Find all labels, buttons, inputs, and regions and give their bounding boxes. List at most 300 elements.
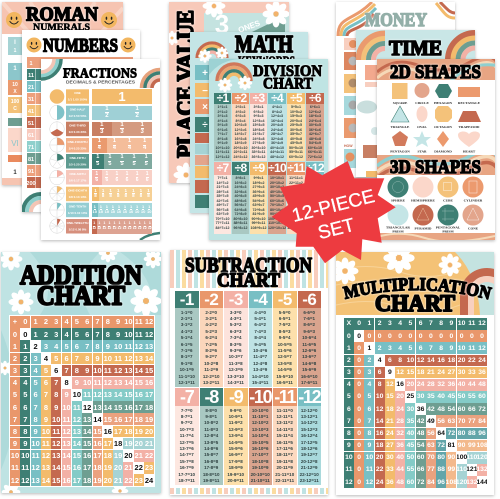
subtraction table: 13-8=5: [204, 440, 218, 445]
multiplication table: 48: [437, 406, 445, 413]
bar: twelfths: 1: [144, 221, 146, 225]
division table: 132÷12=11: [306, 221, 324, 225]
fraction labels: 1/1 1.00 100%: [68, 98, 88, 102]
multiplication table: 66: [417, 466, 424, 473]
addition table: 8: [106, 330, 110, 339]
subtraction table: 14-9=5: [229, 440, 243, 445]
multiplication table: 12: [386, 381, 394, 388]
multiplication table: 20: [407, 381, 414, 388]
2D shape labels: PENTAGON: [390, 150, 410, 154]
division table: 30÷10=3: [270, 185, 284, 189]
multiplication table: 3: [388, 320, 392, 327]
bar: eighths: 8: [125, 193, 127, 198]
subtraction table: 6-2=4: [205, 335, 217, 340]
keyword rows: [195, 65, 215, 208]
addition table: 19: [124, 439, 133, 448]
rainbow: [197, 43, 227, 58]
multiplication table: 18: [386, 406, 394, 413]
bar: fifths: 5: [120, 161, 124, 167]
multiplication table: 20: [396, 393, 404, 400]
division table: 60÷10=6: [270, 198, 284, 202]
division table: 72÷12=6: [308, 198, 322, 202]
addition table: 22: [124, 476, 133, 485]
subtitle: DECIMALS & PERCENTAGES: [66, 80, 136, 86]
addition table: 11: [104, 366, 112, 375]
fraction labels: 1/12 0.08 8%: [69, 227, 87, 231]
subtraction table: 6-4=2: [254, 322, 266, 327]
multiplication table: 16: [437, 357, 445, 364]
addition table: 16: [114, 415, 122, 424]
subtraction table: 14-3=11: [228, 380, 244, 385]
multiplication table: 12: [478, 320, 486, 327]
addition table: 9: [64, 390, 69, 399]
bar: tenths: 1: [124, 204, 126, 209]
division table: 25÷5=5: [290, 123, 302, 127]
division table: 16÷4=4: [271, 118, 283, 122]
division table: 44÷4=11: [270, 150, 284, 154]
multiplication table: 50: [407, 454, 414, 461]
subtraction table: 8-2=6: [205, 348, 217, 353]
bar: fifths: [92, 154, 152, 168]
multiplication table: 77: [427, 466, 435, 473]
addition table: 10: [31, 439, 40, 448]
addition table: 10: [42, 427, 50, 436]
poster: multiplication chart: [336, 252, 494, 495]
subtraction table: 10-3=7: [229, 354, 243, 359]
icon: smiley left: [6, 12, 22, 28]
title: fractions: FRACTIONS: [63, 66, 137, 82]
addition table: 13: [62, 439, 71, 448]
bar: tenths: 1: [148, 204, 150, 209]
bar: twelfths: 1: [129, 221, 131, 225]
division table: 3÷3=1: [253, 105, 264, 109]
division table: 63÷7=9: [216, 212, 229, 216]
addition table: 15: [145, 366, 153, 375]
addition table: 8: [64, 378, 69, 387]
addition table: 4: [44, 354, 48, 363]
addition table: 6: [23, 403, 27, 412]
subtraction table: 9-4=5: [254, 342, 266, 347]
numeral cards: I: [14, 40, 16, 46]
bar: twelfths: 1: [139, 221, 141, 225]
multiplication table: 6: [419, 320, 422, 327]
division table: 48÷4=12: [270, 154, 284, 158]
multiplication table: 66: [468, 406, 476, 413]
addition table: 12: [114, 366, 122, 375]
bar: eighths: 8: [117, 193, 119, 198]
division table: 110÷11=10: [287, 216, 305, 220]
title: chart: CHART: [375, 291, 455, 316]
multiplication table: 0: [388, 333, 392, 340]
subtraction table: 10-6=4: [302, 335, 316, 340]
addition table: 20: [135, 439, 143, 448]
division table: 8÷4=2: [272, 110, 282, 114]
subtraction table: 18-9=9: [229, 465, 243, 470]
subtraction table: 18-10=8: [252, 459, 269, 464]
multiplication table: 32: [437, 381, 445, 388]
3D shape labels: PYRAMID: [415, 226, 432, 230]
bar: halves: 2: [105, 113, 109, 119]
subtraction table: 5-3=2: [230, 322, 242, 327]
addition table: 9: [23, 439, 27, 448]
bar: tenths: [92, 203, 152, 217]
division table: 88÷11=8: [289, 208, 303, 212]
number grid: 51: [28, 121, 34, 127]
multiplication table: 5: [408, 345, 412, 352]
fraction labels: 1/6 0.17 17%: [69, 178, 87, 182]
division table: 24÷12=2: [308, 180, 322, 184]
subtraction table: 16-5=11: [277, 380, 293, 385]
multiplication table: 4: [398, 320, 402, 327]
bar: sixths: 1: [136, 171, 138, 177]
addition table: 10: [21, 451, 29, 460]
bar: eighths: 8: [109, 193, 112, 198]
addition table: 24: [145, 476, 153, 485]
division table: 6÷1=6: [217, 128, 228, 132]
number grid: 91: [28, 169, 34, 175]
addition table: 16: [145, 378, 153, 387]
addition table: 19: [135, 427, 143, 436]
addition table: 11: [73, 403, 81, 412]
division table: 90÷9=10: [251, 216, 266, 220]
division table: 80÷8=10: [233, 216, 248, 220]
fraction labels: 1/8 0.13 13%: [69, 195, 87, 199]
addition table: 18: [145, 403, 153, 412]
division table: 99÷9=11: [252, 221, 265, 225]
3D shape icons: [388, 176, 484, 226]
addition table: 8: [106, 317, 110, 326]
subtraction table: 6-5=1: [279, 316, 291, 321]
multiplication table: 8: [368, 430, 371, 437]
subtraction table: 12-6=6: [302, 348, 316, 353]
3D shape labels: PRISM: [442, 230, 454, 234]
addition table: 20: [124, 451, 133, 460]
multiplication table: 7: [368, 418, 371, 425]
multiplication table: 18: [417, 369, 424, 376]
addition table: 12: [42, 451, 50, 460]
addition table: 14: [145, 354, 153, 363]
division table: 35÷7=5: [216, 194, 229, 198]
division table: 50÷10=5: [270, 194, 284, 198]
bar: sixths: 1: [95, 171, 98, 177]
addition table: 13: [104, 390, 112, 399]
title: money: MONEY: [365, 10, 427, 31]
multiplication table: 28: [427, 381, 435, 388]
bar: tenths: 1: [142, 204, 144, 209]
bar: tenths: 10: [129, 209, 133, 214]
division table: 100÷10=10: [268, 216, 286, 220]
multiplication table: 96: [437, 479, 445, 486]
multiplication table: 0: [460, 333, 463, 340]
division table: 28÷4=7: [271, 132, 283, 136]
subtraction table: 14-10=4: [252, 433, 269, 438]
addition table: 8: [54, 390, 58, 399]
subtraction table: 3-1=2: [181, 322, 193, 327]
multiplication table: 44: [396, 466, 404, 473]
division table: 36÷12=3: [308, 185, 322, 189]
addition table: 3: [54, 317, 58, 326]
addition table: 6: [13, 403, 17, 412]
division table: 6÷3=2: [253, 110, 264, 114]
subtraction table: 13-4=9: [253, 367, 267, 372]
multiplication table: 45: [407, 442, 414, 449]
2D shape icons: [391, 83, 481, 147]
bar: sixths: 6: [95, 177, 98, 183]
bar: tenths: 1: [100, 204, 102, 209]
bar: twelfths: 1: [93, 221, 95, 225]
bar: tenths: 1: [106, 204, 108, 209]
bar: twelfths: [92, 219, 152, 234]
subtraction table: [175, 291, 321, 485]
multiplication table: 0: [398, 333, 402, 340]
subtraction table: 13-11=2: [277, 420, 293, 425]
2D shape labels: OVAL: [417, 125, 427, 129]
fraction labels: 1/2 0.50 50%: [69, 114, 87, 118]
addition table: 9: [75, 378, 79, 387]
addition table: 7: [54, 378, 58, 387]
coin rows: [344, 38, 358, 168]
division table: 4÷1=4: [217, 118, 228, 122]
place value panel: [204, 9, 294, 53]
multiplication table: 60: [407, 479, 414, 486]
addition table: 3: [34, 354, 38, 363]
bar: twelfths: 12: [97, 226, 101, 230]
subtraction table: 10-1=9: [180, 367, 194, 372]
addition table: 7: [13, 415, 17, 424]
number grid: [26, 57, 133, 188]
subtraction table: 14-11=3: [277, 427, 293, 432]
division table: 72÷6=12: [308, 154, 322, 158]
bar: thirds: 1: [100, 122, 104, 128]
multiplication table: 90: [458, 442, 465, 449]
stripes bottom: [170, 488, 328, 494]
addition table: 16: [135, 390, 143, 399]
title: chart: CHART: [263, 76, 313, 92]
addition table: 6: [44, 378, 48, 387]
division table: 32÷4=8: [271, 136, 283, 140]
addition table: 16: [104, 427, 112, 436]
multiplication table: 28: [396, 418, 404, 425]
addition table: 21: [145, 439, 153, 448]
bar: halves: 1: [135, 106, 139, 112]
subtraction table: 16-12=4: [301, 433, 318, 438]
addition table: 2: [44, 317, 48, 326]
division table: 66÷6=11: [308, 150, 322, 154]
bar: sixths: 6: [105, 177, 108, 183]
multiplication table: 12: [417, 357, 424, 364]
division table: 22÷11=2: [289, 180, 303, 184]
multiplication table: 50: [458, 393, 465, 400]
subtraction table: 4-4=0: [254, 310, 266, 314]
division table: 15÷5=3: [290, 114, 302, 118]
division table: 16÷2=8: [234, 136, 247, 140]
multiplication table: 63: [448, 418, 455, 425]
addition table: 7: [85, 342, 89, 351]
fraction labels: [66, 89, 89, 234]
subtraction table: 7-1=6: [181, 348, 193, 353]
poster: subtraction chart: [170, 250, 328, 495]
addition table: 1: [13, 342, 17, 351]
subtraction table: 10-9=1: [229, 414, 243, 419]
2D shape labels: STAR: [417, 150, 427, 154]
multiplication table: 24: [478, 357, 486, 364]
multiplication table: 12: [376, 406, 383, 413]
bar: tenths: 10: [123, 209, 127, 214]
multiplication table: 4: [368, 381, 371, 388]
subtraction table: 4-3=1: [230, 316, 242, 321]
addition table: 16: [62, 476, 71, 485]
multiplication table: 4: [347, 381, 351, 388]
multiplication table: 0: [408, 333, 412, 340]
division table: 50÷5=10: [289, 146, 303, 150]
multiplication table: 42: [417, 418, 424, 425]
badge: 12-piece set star: [272, 161, 396, 264]
multiplication table: 3: [388, 345, 392, 352]
daisies: [198, 47, 228, 63]
bar: tenths: 10: [141, 209, 145, 214]
2D shape labels: OCTAGON: [434, 125, 452, 129]
subtraction table: 5-1=4: [181, 335, 193, 340]
multiplication table: 0: [429, 333, 433, 340]
multiplication table: 10: [366, 454, 373, 461]
addition table: 10: [104, 354, 112, 363]
multiplication table: 12: [478, 345, 486, 352]
division table: 12÷1=12: [215, 154, 230, 158]
addition table: 22: [135, 463, 143, 472]
division table: 60÷12=5: [308, 194, 322, 198]
multiplication table: 0: [449, 333, 453, 340]
addition table: 12: [83, 403, 91, 412]
bar: eighths: 8: [147, 193, 150, 198]
3D shape labels: [386, 198, 483, 234]
addition table: 7: [75, 354, 79, 363]
multiplication table: 9: [388, 369, 392, 376]
bar: halves: 2: [135, 113, 139, 119]
division table: 40÷5=8: [290, 136, 302, 140]
division table: 27÷9=3: [252, 185, 265, 189]
multiplication table: 25: [407, 393, 414, 400]
subtraction table: 18-11=7: [277, 452, 293, 457]
bar: thirds: 3: [120, 129, 124, 135]
multiplication table: 60: [458, 406, 465, 413]
multiplication table: 0: [357, 333, 361, 340]
number grid: 81: [28, 157, 34, 163]
multiplication table: 18: [448, 357, 455, 364]
division table: 40÷10=4: [270, 190, 284, 194]
addition table: 12: [135, 342, 143, 351]
division table: 11÷11=1: [289, 176, 303, 180]
subtraction table: 16-11=5: [277, 440, 293, 445]
multiplication table: 5: [368, 393, 371, 400]
division table: 96÷8=12: [233, 226, 248, 230]
title: addition: ADDITION: [20, 260, 142, 290]
multiplication table: 0: [357, 406, 361, 413]
multiplication table: 4: [398, 345, 402, 352]
division table: 8÷2=4: [235, 118, 246, 122]
multiplication table: 36: [396, 442, 404, 449]
bar: fifths: 5: [145, 161, 148, 167]
addition table: 7: [34, 403, 38, 412]
division table: 7÷7=1: [217, 176, 228, 180]
division table: 24÷4=6: [271, 128, 283, 132]
addition table: 21: [124, 463, 133, 472]
subtraction table: 9-8=1: [205, 414, 217, 419]
division table: 2÷2=1: [235, 105, 246, 109]
subtraction table: 11-7=4: [180, 433, 194, 438]
division table: 18÷6=3: [309, 114, 321, 118]
addition table: 19: [145, 415, 153, 424]
multiplication table: 6: [388, 357, 392, 364]
subtraction table: 19-8=11: [203, 478, 219, 483]
addition table: 16: [124, 403, 133, 412]
addition table: 21: [114, 476, 122, 485]
multiplication table: 11: [468, 345, 475, 352]
multiplication table: 0: [357, 430, 361, 437]
addition table: 16: [93, 439, 102, 448]
division table: 36÷3=12: [251, 154, 266, 158]
addition table: 15: [124, 390, 133, 399]
division table: 120÷10=12: [268, 226, 286, 230]
addition table: 13: [93, 403, 102, 412]
subtraction table: 17-10=7: [252, 452, 269, 457]
bar: thirds: 1: [120, 122, 124, 128]
division table: 11÷1=11: [216, 150, 229, 154]
multiplication table: 0: [357, 466, 361, 473]
multiplication table: 24: [386, 430, 394, 437]
division table: 33÷3=11: [252, 150, 265, 154]
addition table: 0: [23, 330, 27, 339]
multiplication table: 5: [408, 320, 412, 327]
division table: 20÷4=5: [271, 123, 283, 127]
division table: 2÷1=2: [217, 110, 228, 114]
bar: sixths: [92, 170, 152, 184]
subtraction table: 2-1=1: [181, 316, 193, 321]
subtraction table: 3-3=0: [230, 310, 242, 314]
addition table: 15: [135, 378, 143, 387]
bar: sixths: 1: [126, 171, 128, 177]
addition table: 11: [124, 342, 132, 351]
subtraction table: 23-12=11: [300, 478, 319, 483]
multiplication table: 11: [468, 320, 475, 327]
bar: sixths: 1: [146, 171, 149, 177]
addition table: 17: [83, 463, 91, 472]
poster: 2D and 3D shapes: [377, 59, 495, 240]
addition table: 13: [42, 463, 50, 472]
division table: 5÷1=5: [217, 123, 228, 127]
division table: 60÷6=10: [308, 146, 322, 150]
subtraction table: 3-2=1: [205, 316, 217, 321]
division table: 56÷8=7: [234, 203, 247, 207]
addition table: 14: [83, 427, 91, 436]
division table: 9÷3=3: [253, 114, 264, 118]
multiplication table: 0: [357, 357, 361, 364]
icon: smiley right: [120, 38, 136, 52]
addition table: 1: [23, 342, 27, 351]
addition table: 10: [124, 317, 133, 326]
addition table: 9: [116, 317, 120, 326]
multiplication table: 72: [478, 406, 486, 413]
multiplication table: 10: [345, 454, 353, 461]
division table: 72÷9=8: [252, 208, 265, 212]
multiplication table: 8: [439, 345, 443, 352]
addition table: 9: [13, 439, 17, 448]
bar: eighths: 1: [117, 188, 119, 193]
addition table: 8: [44, 403, 48, 412]
number grid: 41: [28, 109, 34, 115]
multiplication table: 14: [376, 418, 383, 425]
addition table: 2: [34, 342, 38, 351]
subtraction table: 11-4=7: [253, 354, 267, 359]
